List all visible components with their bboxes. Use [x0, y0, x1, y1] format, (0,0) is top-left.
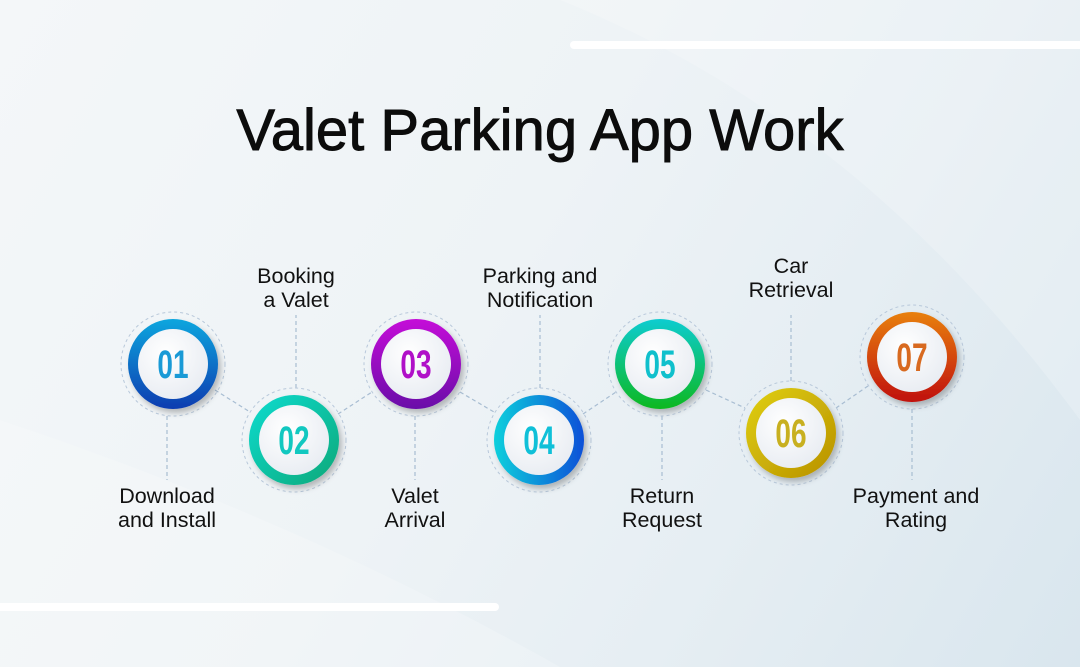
label: Valet Arrival: [384, 484, 445, 532]
label: Valet Arrival: Valet: [391, 484, 439, 508]
step 07 circle: [860, 305, 964, 409]
label: Booking a Valet: a Valet: [263, 288, 329, 312]
step 03 circle: [364, 312, 468, 416]
step 03 circle: 03: [400, 343, 432, 387]
step 04 circle: [487, 388, 591, 492]
label: Return Request: Request: [622, 508, 702, 532]
label: Download and Install: [118, 484, 216, 532]
label: Parking and Notification: [483, 264, 597, 312]
step 01 circle: [121, 312, 225, 416]
step 04 circle: 04: [523, 419, 555, 463]
label: Payment and Rating: Rating: [885, 508, 947, 532]
title: Valet Parking App Work: [236, 98, 844, 163]
step 01 circle: 01: [157, 343, 189, 387]
label: Car Retrieval: Retrieval: [749, 278, 833, 302]
label: Booking a Valet: [257, 264, 335, 312]
step 05 circle: [608, 312, 712, 416]
label: Car Retrieval: [749, 254, 833, 302]
step 06 circle: 06: [775, 412, 807, 456]
label: Download and Install: and Install: [118, 508, 216, 532]
step 06 circle: [739, 381, 843, 485]
label: Return Request: [622, 484, 702, 532]
step 05 circle: 05: [644, 343, 676, 387]
label: Payment and Rating: Payment and: [853, 484, 979, 508]
label: Parking and Notification: Parking and: [483, 264, 597, 288]
label: Booking a Valet: Booking: [257, 264, 335, 288]
step 07 circle: 07: [896, 336, 928, 380]
label: Parking and Notification: Notification: [487, 288, 593, 312]
label: Payment and Rating: [853, 484, 979, 532]
step 02 circle: [242, 388, 346, 492]
label: Return Request: Return: [630, 484, 694, 508]
step 02 circle: 02: [278, 419, 310, 463]
label: Valet Arrival: Arrival: [385, 508, 445, 532]
label: Car Retrieval: Car: [774, 254, 808, 278]
label: Download and Install: Download: [119, 484, 215, 508]
